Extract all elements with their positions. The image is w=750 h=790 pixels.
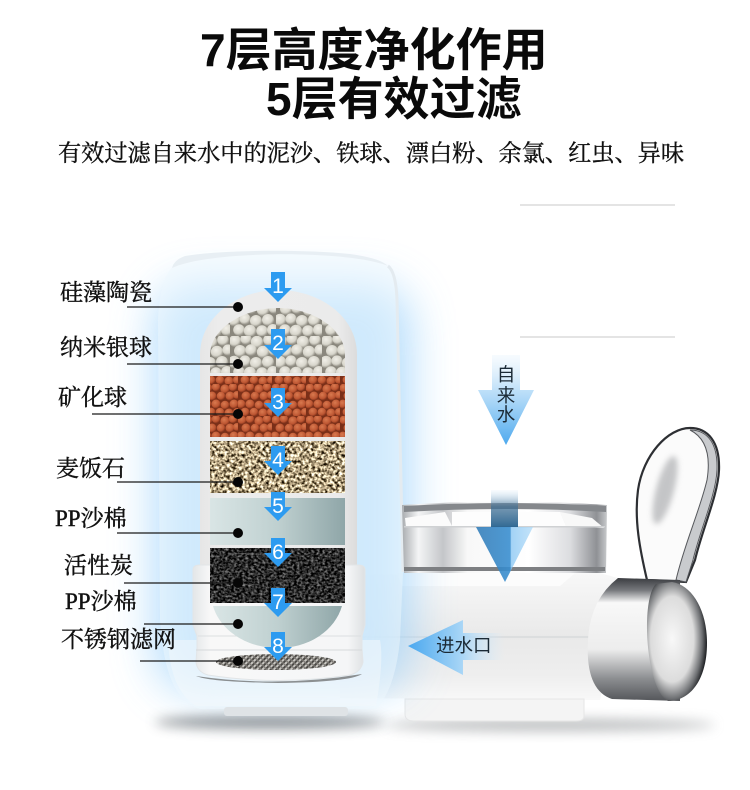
tap water arrow: 水 [497,404,516,425]
arrow 6 [264,538,292,567]
numbered flow arrows [264,272,292,661]
layer 4 gravel [210,441,345,493]
arrow 6: 6 [272,541,284,564]
layer 8 mesh [216,654,336,670]
chrome ring [402,502,607,573]
faucet body [340,573,625,721]
arrow 8 [264,632,292,661]
tap water arrow [478,355,534,445]
layer labels: 矿化球 [58,385,127,410]
arrow 7 [264,588,292,617]
layer labels: 硅藻陶瓷 [60,280,152,305]
tap water arrow: 来 [497,385,515,406]
arrow 4 [264,446,292,475]
arrow 5: 5 [272,495,284,518]
chrome end cap [588,578,707,701]
filter cartridge [193,290,365,683]
layer labels: 纳米银球 [60,335,152,360]
arrow 5 [264,492,292,521]
arrow 2 [264,329,292,359]
layer labels: 麦饭石 [56,456,125,481]
layer 7 pp cotton [213,606,342,648]
arrow 3: 3 [272,391,284,414]
arrow 4: 4 [272,449,284,472]
blue glow behind filter [155,285,410,690]
layer labels: PP沙棉 [55,506,127,531]
filter housing [158,251,403,716]
arrow 7: 7 [272,591,284,614]
layer 6 carbon [210,548,345,603]
inlet down arrow [476,490,533,582]
layer labels [55,280,176,652]
subtitle: 有效过滤自来水中的泥沙、铁球、漂白粉、余氯、红虫、异味 [58,141,684,167]
arrow 3 [264,388,292,417]
layer 3 red balls [210,376,345,437]
arrow 8: 8 [272,635,284,658]
inlet left arrow [408,620,505,675]
tap water arrow: 自 [497,364,515,385]
layer labels: 不锈钢滤网 [61,627,176,652]
faucet ground shadow [155,715,715,731]
layer labels: PP沙棉 [65,589,137,614]
layer labels: 活性炭 [64,553,133,578]
arrow 1: 1 [272,275,284,298]
chrome lever handle [637,428,719,582]
inlet left arrow: 进水口 [436,635,492,656]
cartridge shell [200,290,357,570]
title: 7层高度净化作用 [200,24,548,76]
title [200,24,548,125]
title: 5层有效过滤 [266,73,522,125]
arrow 2: 2 [272,332,284,355]
layer 2 white balls [210,308,345,373]
callout lines and dots [92,302,243,666]
arrow 1 [264,272,292,302]
threaded collar [193,565,365,680]
layer 5 pp cotton [210,498,345,545]
